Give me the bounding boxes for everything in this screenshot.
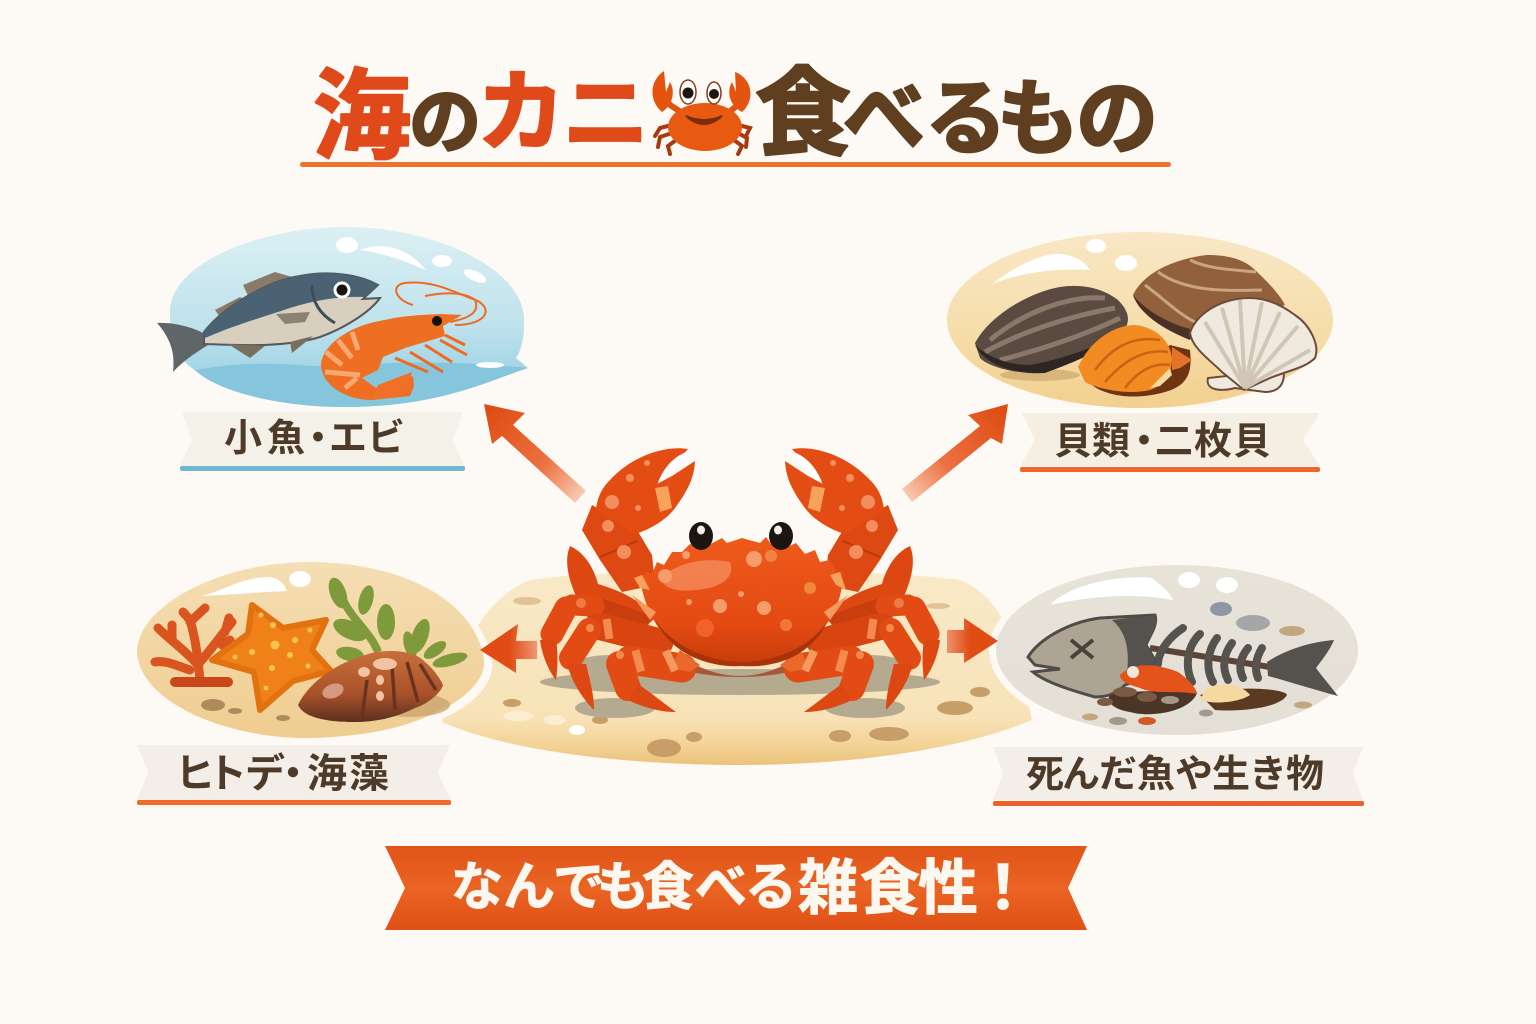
title: ニ (563, 67, 649, 163)
icon: fish skeleton (1028, 615, 1338, 697)
title: 海 (313, 61, 411, 171)
crab left limbs (540, 448, 700, 712)
label: dead fish and creatures: 死んだ魚や生き物 (1026, 754, 1324, 796)
label: dead fish and creatures (993, 747, 1364, 806)
bottom banner: 雑食性！ (798, 855, 1033, 922)
label: shellfish and clams (1020, 413, 1320, 472)
arrow to top-right (902, 404, 1008, 502)
crab carapace (640, 537, 843, 664)
panel: small fish and shrimp (157, 227, 528, 407)
bottom banner: なんでも食べる (451, 859, 797, 917)
icon: seaweed (325, 575, 469, 670)
panel: shellfish and clams (947, 232, 1333, 408)
title: る (925, 74, 1007, 165)
crab arm (582, 505, 655, 592)
crab claw (596, 448, 695, 534)
sand ground under crab (442, 571, 1032, 765)
title underline (300, 162, 1171, 167)
title: カ (477, 63, 565, 162)
title (313, 61, 1158, 171)
title: の (409, 83, 481, 163)
panel: starfish and seaweed (130, 555, 492, 745)
icon: scallop (1190, 298, 1316, 392)
icon: brown shell (298, 651, 450, 722)
title: も (997, 74, 1079, 165)
label: shellfish and clams: 貝類・二枚貝 (1054, 421, 1271, 463)
title: 食 (755, 61, 851, 168)
arrow to top-left (484, 404, 586, 503)
icon: shrimp (321, 282, 486, 400)
title: べ (843, 73, 925, 164)
label: starfish and seaweed (137, 745, 451, 805)
water bubble (170, 227, 528, 407)
icon: starfish (212, 605, 331, 710)
title: の (1076, 74, 1158, 165)
icon: dark clam (975, 286, 1128, 381)
icon: brown clam (1133, 255, 1285, 340)
icon: fish (157, 272, 380, 372)
icon: small crab in title (652, 71, 750, 154)
panel: dead fish and creatures (989, 558, 1365, 742)
label: starfish and seaweed: ヒトデ・海藻 (175, 751, 389, 796)
arrow to right (947, 618, 998, 663)
crab eyes (689, 522, 793, 550)
label: small fish and shrimp: 小魚・エビ (224, 418, 405, 460)
label: small fish and shrimp (180, 412, 465, 471)
crab shadow (540, 655, 940, 718)
icon: coral (155, 608, 232, 682)
central crab (540, 448, 940, 712)
icon: debris and crab remains (1097, 665, 1287, 714)
crab right limbs mirrored (780, 448, 940, 712)
arrow to left (480, 624, 537, 673)
bottom banner (385, 846, 1087, 930)
icon: orange cockle (1078, 325, 1192, 397)
